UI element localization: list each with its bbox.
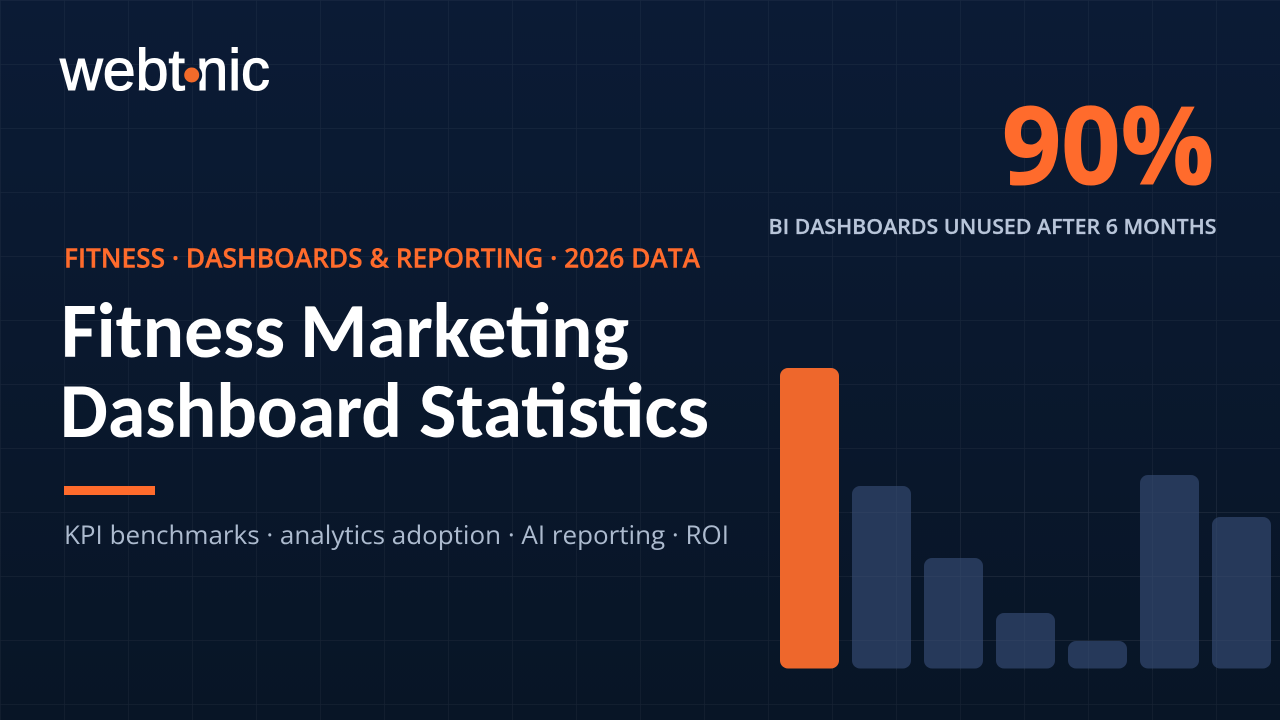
bar 3 bbox=[924, 558, 983, 668]
bar chart bbox=[780, 368, 1271, 668]
logo: webtonic: webt bbox=[59, 38, 185, 103]
bar 4 bbox=[996, 613, 1055, 668]
stat caption: BI DASHBOARDS UNUSED AFTER 6 MONTHS bbox=[768, 213, 1216, 241]
title: Fitness bbox=[61, 283, 285, 378]
logo: webtonic bbox=[59, 38, 270, 103]
title: Marketing bbox=[300, 283, 629, 378]
icon: logo orange dot bbox=[184, 68, 199, 82]
big stat: 90%: 90% bbox=[1002, 69, 1214, 216]
bar 2 bbox=[852, 486, 911, 668]
bar 5 bbox=[1068, 641, 1127, 668]
title: Statistics bbox=[419, 363, 709, 458]
title bbox=[60, 283, 709, 458]
subtitle: KPI benchmarks · analytics adoption · AI reporting · ROI bbox=[64, 516, 729, 552]
bar 7 bbox=[1212, 517, 1271, 668]
eyebrow: FITNESS · DASHBOARDS & REPORTING · 2026 DATA bbox=[64, 240, 701, 276]
bar 6 bbox=[1140, 475, 1199, 668]
highlighted bar bbox=[780, 368, 839, 668]
title: Dashboard bbox=[60, 363, 402, 458]
logo: webtonic: nic bbox=[196, 38, 270, 103]
accent rule bbox=[64, 486, 155, 495]
